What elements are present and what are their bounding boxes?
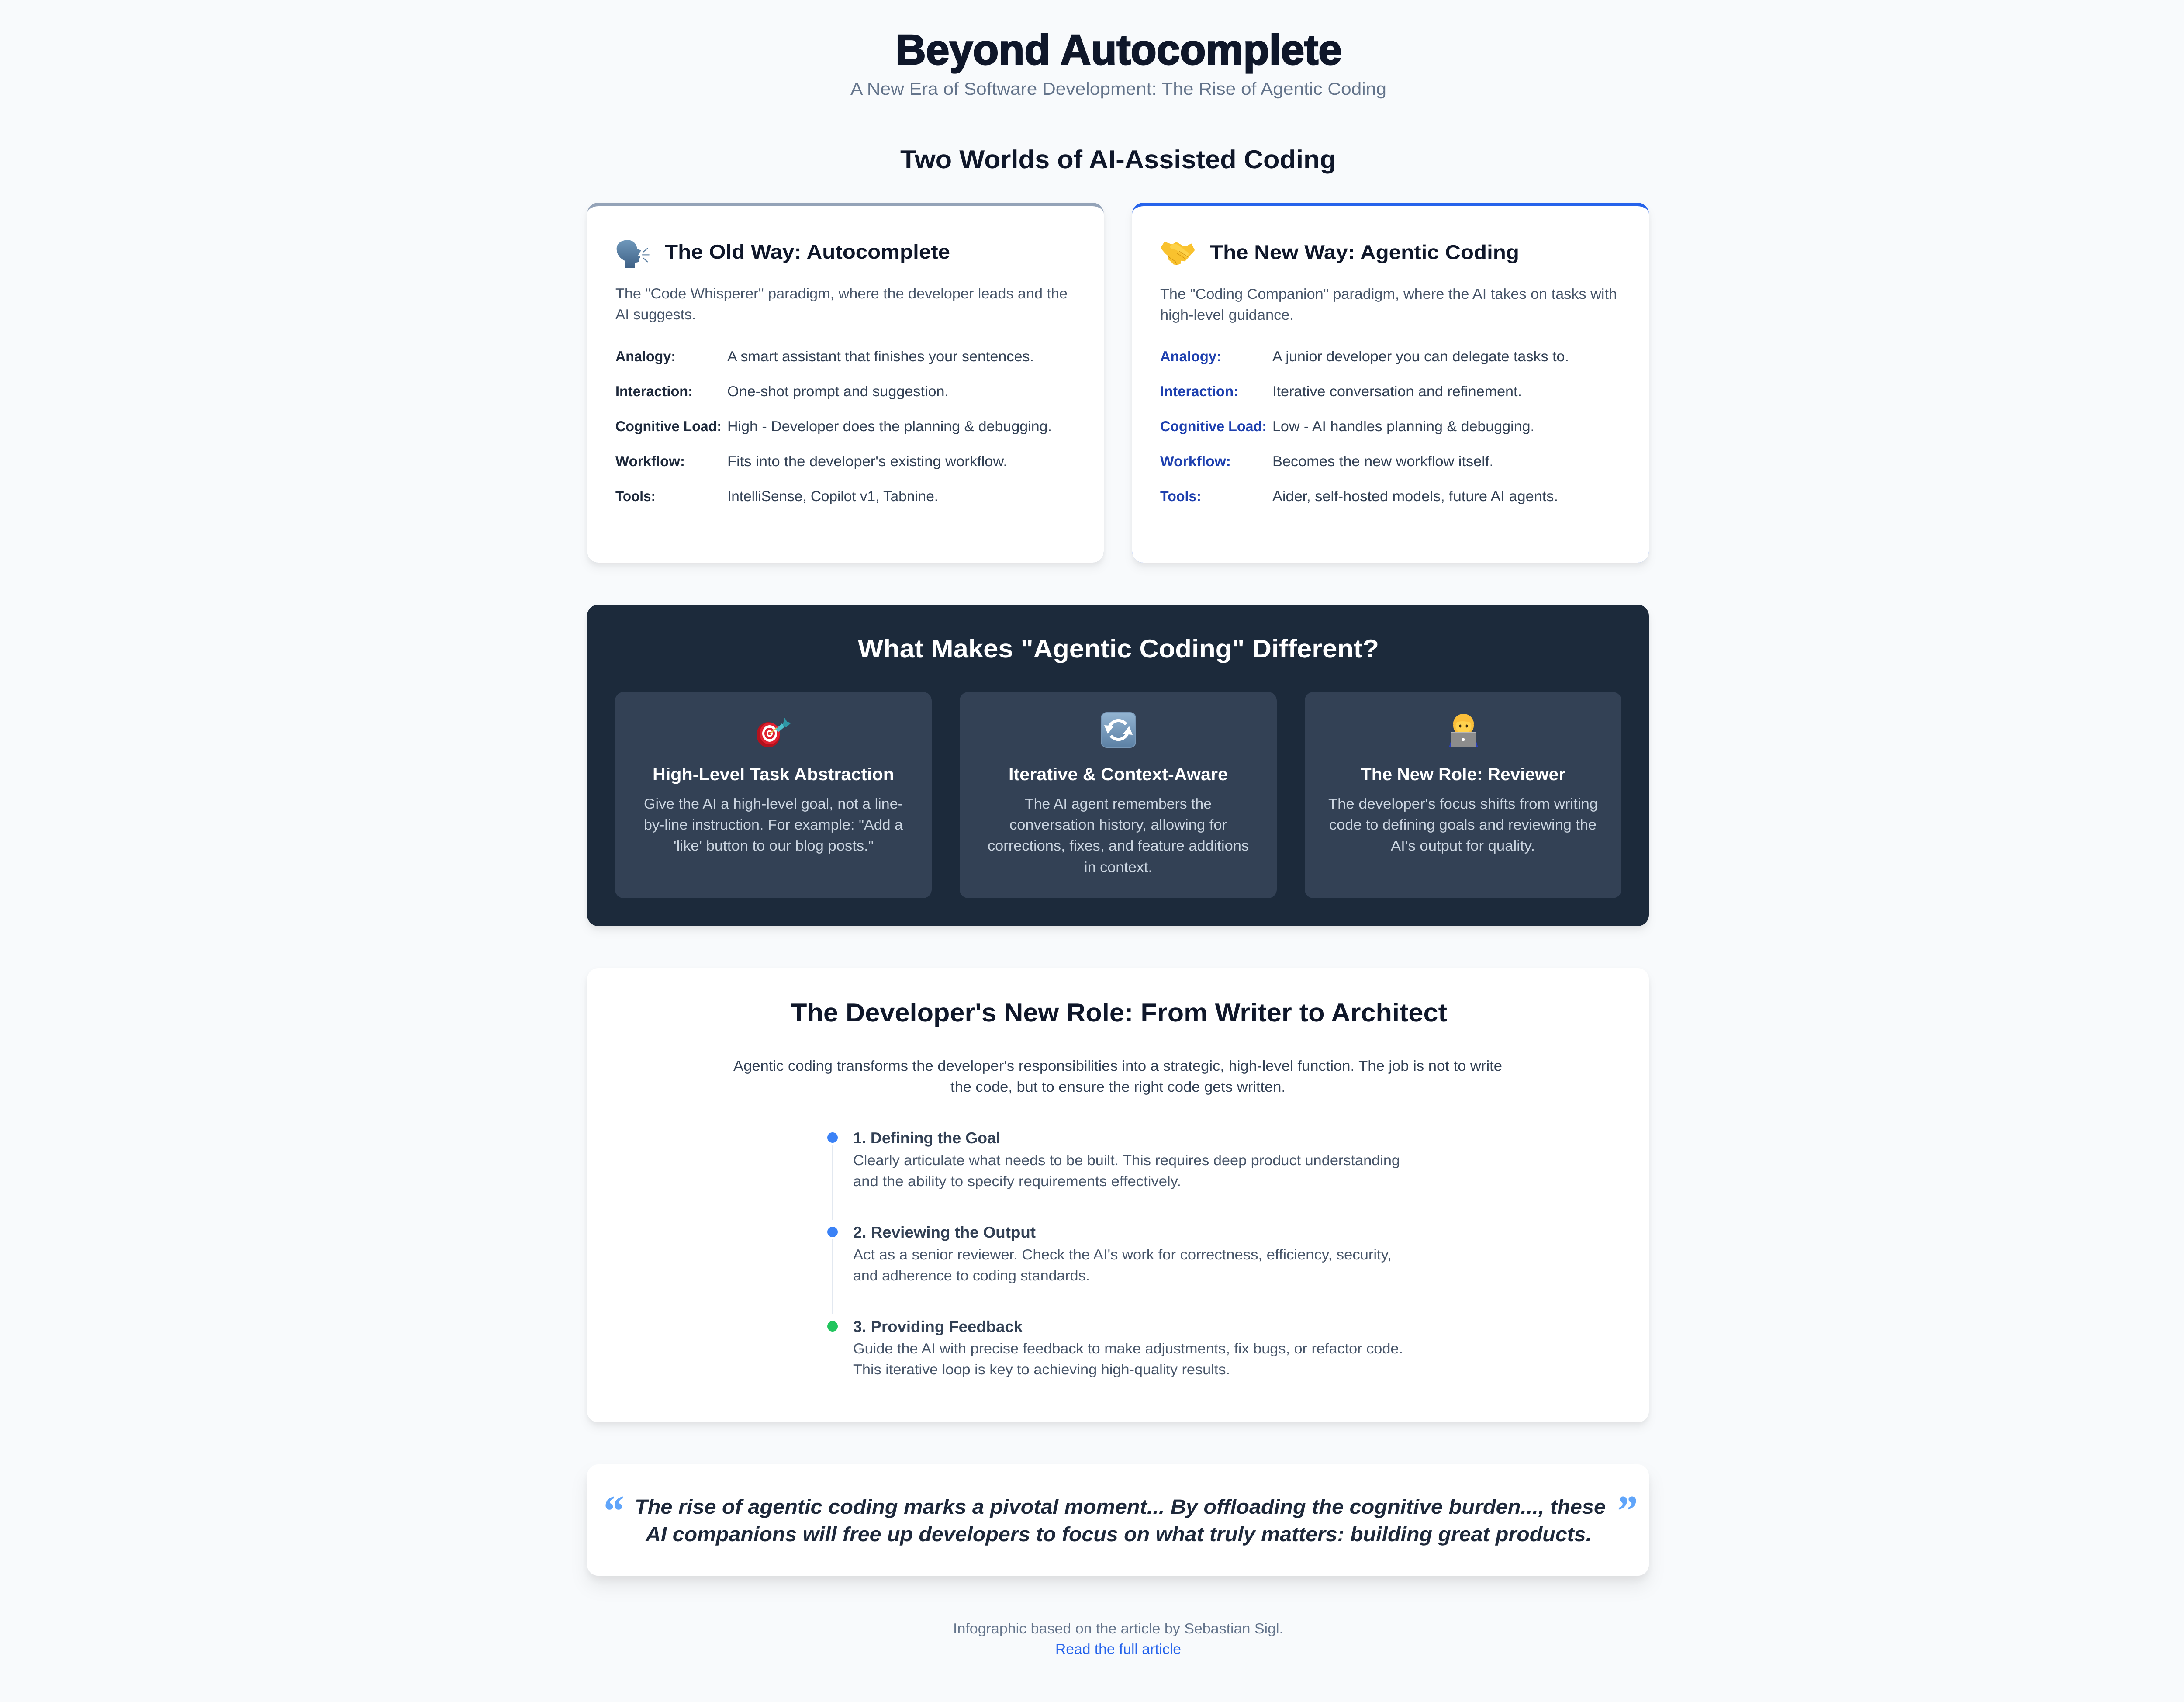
icon: handshake	[1161, 242, 1195, 265]
opening quote mark: “	[601, 1487, 623, 1535]
row: cognitive load: Cognitive Load:	[1160, 418, 1267, 434]
quote text: AI companions will free up developers to focus on what truly matters: building great products.	[645, 1522, 1592, 1546]
row: tools: Tools:	[615, 488, 656, 504]
row: workflow	[615, 453, 1007, 469]
card text: corrections, fixes, and feature additions	[988, 837, 1249, 854]
row: tools: IntelliSense, Copilot v1, Tabnine.	[727, 488, 938, 504]
card text: The developer's focus shifts from writing	[1328, 796, 1598, 812]
step 1: defining the goal	[827, 1129, 1400, 1189]
row: tools	[615, 488, 938, 504]
row: cognitive load: Low - AI handles planning & debugging.	[1272, 418, 1534, 434]
card text: The AI agent remembers the	[1025, 796, 1212, 812]
attribution: Infographic based on the article by Sebastian Sigl.	[953, 1620, 1283, 1636]
card text: 'like' button to our blog posts."	[674, 837, 874, 854]
card heading: High-Level Task Abstraction	[653, 765, 894, 784]
step 1: defining the goal: Clearly articulate what needs to be built. This requires deep product understanding	[853, 1152, 1400, 1168]
panel: the developer's new role	[587, 968, 1649, 1422]
step 1: defining the goal: 1. Defining the Goal	[853, 1129, 1000, 1147]
card heading: The New Way: Agentic Coding	[1210, 241, 1519, 263]
row: cognitive load: High - Developer does the planning & debugging.	[727, 418, 1052, 434]
feature card: iterative and context-aware	[960, 692, 1277, 898]
row: interaction: Interaction:	[615, 383, 693, 399]
description	[615, 285, 1068, 322]
description: The "Coding Companion" paradigm, where the AI takes on tasks with	[1160, 286, 1617, 302]
card text	[988, 796, 1249, 875]
closing quote mark: ”	[1615, 1487, 1637, 1535]
timeline	[827, 1129, 1403, 1377]
card heading: Iterative & Context-Aware	[1009, 765, 1228, 784]
row: interaction: One-shot prompt and suggestion.	[727, 383, 949, 399]
intro text	[733, 1058, 1502, 1095]
row: analogy: A junior developer you can delegate tasks to.	[1272, 348, 1569, 364]
description: high-level guidance.	[1160, 307, 1294, 323]
row: interaction	[1160, 383, 1522, 399]
card text: in context.	[1084, 859, 1152, 875]
section heading: What Makes "Agentic Coding" Different?	[858, 634, 1379, 663]
intro text: the code, but to ensure the right code gets written.	[950, 1079, 1286, 1095]
panel: the old way	[587, 203, 1104, 563]
header: title and subtitle	[850, 26, 1386, 99]
title: Beyond Autocomplete	[895, 26, 1342, 73]
step 3: providing feedback: 3. Providing Feedback	[853, 1318, 1023, 1335]
icon: cycle arrows	[1101, 713, 1136, 747]
row: tools: Tools:	[1160, 488, 1201, 504]
row: workflow: Workflow:	[615, 453, 685, 469]
quote text	[635, 1495, 1606, 1546]
step 3: providing feedback: This iterative loop is key to achieving high-quality results.	[853, 1361, 1230, 1377]
intro text: Agentic coding transforms the developer's responsibilities into a strategic, high-level function. The job is not to write	[733, 1058, 1502, 1074]
icon: technologist at laptop	[1449, 714, 1478, 747]
card text	[644, 796, 903, 854]
article link: Read the full article	[1055, 1641, 1181, 1657]
row: cognitive load	[1160, 418, 1534, 434]
step 1: defining the goal: and the ability to specify requirements effectively.	[853, 1173, 1181, 1189]
step 2: reviewing the output	[827, 1223, 1392, 1283]
row: analogy: Analogy:	[615, 348, 676, 364]
row: analogy: Analogy:	[1160, 348, 1221, 364]
card text: conversation history, allowing for	[1009, 816, 1227, 833]
row: cognitive load: Cognitive Load:	[615, 418, 722, 434]
row: workflow: Workflow:	[1160, 453, 1231, 469]
step 2: reviewing the output: and adherence to coding standards.	[853, 1267, 1090, 1283]
panel: closing quote	[587, 1464, 1649, 1576]
quote text: The rise of agentic coding marks a pivotal moment... By offloading the cognitive burden..., these	[635, 1495, 1606, 1518]
description: The "Code Whisperer" paradigm, where the developer leads and the	[615, 285, 1068, 301]
description	[1160, 286, 1617, 323]
row: interaction: Iterative conversation and refinement.	[1272, 383, 1522, 399]
panel: what makes agentic coding different	[587, 605, 1649, 926]
step 3: providing feedback: Guide the AI with precise feedback to make adjustments, fix bugs, or refactor code.	[853, 1340, 1403, 1356]
card text: AI's output for quality.	[1391, 837, 1535, 854]
card heading: The Old Way: Autocomplete	[665, 240, 950, 263]
step 2: reviewing the output: Act as a senior reviewer. Check the AI's work for correctness, efficiency, security,	[853, 1246, 1392, 1263]
footer	[953, 1620, 1283, 1657]
row: workflow: Fits into the developer's existing workflow.	[727, 453, 1007, 469]
card text: by-line instruction. For example: "Add a	[644, 816, 903, 833]
row: workflow	[1160, 453, 1493, 469]
subtitle: A New Era of Software Development: The Rise of Agentic Coding	[850, 80, 1386, 99]
row: interaction: Interaction:	[1160, 383, 1238, 399]
feature card: high-level task abstraction	[615, 692, 932, 898]
card text: code to defining goals and reviewing the	[1329, 816, 1597, 833]
step 3: providing feedback	[827, 1318, 1403, 1377]
row: workflow: Becomes the new workflow itself.	[1272, 453, 1493, 469]
description: AI suggests.	[615, 306, 696, 322]
icon: speaking head	[617, 240, 649, 268]
section heading: The Developer's New Role: From Writer to Architect	[791, 998, 1447, 1027]
panel: the new way	[1132, 203, 1649, 563]
icon: dart hitting target	[757, 718, 791, 747]
feature card: the new role reviewer	[1305, 692, 1621, 898]
row: analogy: A smart assistant that finishes your sentences.	[727, 348, 1034, 364]
row: tools	[1160, 488, 1558, 504]
card text	[1328, 796, 1598, 854]
row: tools: Aider, self-hosted models, future AI agents.	[1272, 488, 1558, 504]
row: interaction	[615, 383, 949, 399]
card text: Give the AI a high-level goal, not a line-	[644, 796, 903, 812]
step 2: reviewing the output: 2. Reviewing the Output	[853, 1223, 1036, 1241]
heading: two worlds: Two Worlds of AI-Assisted Coding	[900, 145, 1336, 174]
card heading: The New Role: Reviewer	[1361, 765, 1565, 784]
